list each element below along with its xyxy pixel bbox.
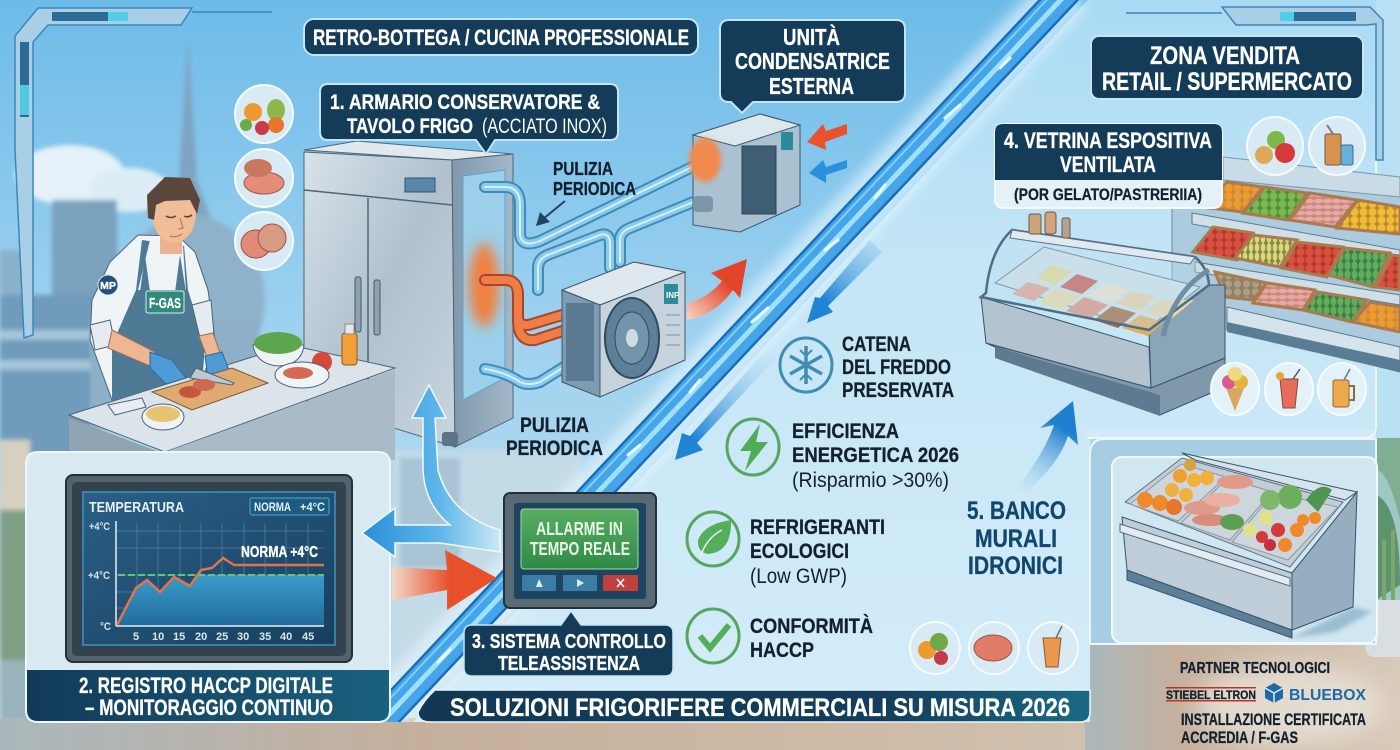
icon: fruit: [235, 85, 293, 143]
arrow: red alarm signal: [392, 550, 497, 610]
monitor: 35: [259, 631, 271, 643]
feature: energy efficiency: ENERGETICA 2026: [792, 444, 959, 467]
heading: zona vendita: [1091, 36, 1363, 99]
feature: HACCP compliance: HACCP: [750, 639, 814, 662]
monitor: +4°C: [88, 570, 110, 582]
icon: steak: [235, 212, 293, 270]
feature: ecological refrigerants: [687, 512, 885, 588]
monitor: NORMA: [254, 500, 291, 514]
label 1: armario conservatore: 1. ARMARIO CONSERVATORE &: [330, 91, 600, 114]
feature: ecological refrigerants: REFRIGERANTI: [750, 516, 885, 539]
chef apron badge: F-GAS: [149, 295, 181, 312]
chef: [90, 177, 231, 401]
heading: zona vendita: ZONA VENDITA: [1150, 42, 1300, 70]
icons: bottom food circles: [910, 622, 1078, 674]
feature: HACCP compliance: CONFORMITÀ: [750, 615, 873, 638]
icon: meat: [969, 622, 1019, 674]
feature: ecological refrigerants: ECOLOGICI: [750, 540, 849, 563]
monitor: 15: [173, 631, 185, 643]
crates row 3: [1215, 272, 1400, 332]
label 1: armario conservatore: [320, 84, 618, 154]
arrow: cold chain down 1: [807, 240, 882, 323]
label 4: vetrina espositiva: 4. VETRINA ESPOSITIVA: [1004, 128, 1212, 153]
label: pulizia periodica upper: PULIZIA: [553, 159, 613, 179]
monitor: 40: [280, 631, 292, 643]
icon: snowflake: [780, 338, 832, 392]
partners and certification: [1166, 660, 1366, 747]
label 5: banco murali: 5. BANCO: [967, 497, 1066, 525]
icon: drinks: [1309, 117, 1365, 175]
monitor: 5: [133, 631, 139, 643]
icon: check mark: [687, 609, 739, 663]
device: remote control alarm: [504, 493, 656, 608]
counter: [69, 345, 395, 460]
icon: beer mug: [1318, 363, 1366, 415]
label: unita condensatrice: CONDENSATRICE: [735, 48, 890, 74]
arrow: three-way control flow: [362, 385, 500, 557]
device: remote control alarm: ALLARME IN: [536, 519, 623, 539]
plant: [1340, 438, 1400, 657]
arrow: cold chain down 2: [675, 350, 776, 460]
logo: Bluebox: [1265, 683, 1366, 704]
frame: top right corner: [1126, 7, 1383, 160]
monitor: 45: [302, 631, 314, 643]
label: unita condensatrice: ESTERNA: [769, 73, 854, 99]
icon: juice cocktail: [1265, 363, 1313, 415]
monitor: 20: [195, 631, 207, 643]
fridge: steel cabinet: [304, 141, 513, 447]
icon: apples: [1247, 117, 1303, 175]
monitor: 10: [152, 631, 164, 643]
label 3: control system: 3. SISTEMA CONTROLLO: [472, 631, 666, 653]
label: pulizia periodica lower: [506, 414, 603, 460]
panel: HACCP digital register: 2. REGISTRO HACCP DIGITALE: [79, 673, 333, 698]
logo: Bluebox: BLUEBOX: [1289, 687, 1366, 704]
icon: fruit: [910, 622, 960, 674]
monitor: +4°C: [300, 500, 325, 514]
icons: food circles left: [235, 85, 293, 270]
label 5: banco murali: MURALI: [975, 525, 1057, 553]
crates row 1: [1202, 182, 1400, 234]
feature: cold chain: CATENA: [842, 333, 911, 356]
icon: lightning bolt: [727, 419, 779, 475]
panel: HACCP digital register: – MONITORAGGIO CONTINUO: [85, 695, 333, 720]
partners and certification: PARTNER TECNOLOGICI: [1180, 660, 1330, 677]
fruit and vegetables: [1137, 459, 1332, 552]
heading: retro-bottega: RETRO-BOTTEGA / CUCINA PROFESSIONALE: [313, 25, 689, 50]
condensing unit: external: [689, 114, 800, 232]
diagonal divider band: [368, 0, 1070, 722]
icon: drink: [1028, 622, 1078, 674]
label: unita condensatrice: UNITÀ: [783, 23, 840, 50]
arrow: hot air out: [687, 259, 747, 320]
label 4: vetrina espositiva: (POR GELATO/PASTRERIIA): [1014, 185, 1202, 204]
counter body: [1120, 453, 1357, 638]
monitor: 30: [237, 631, 249, 643]
label 4: vetrina espositiva: VENTILATA: [1060, 152, 1156, 177]
pipes: refrigerant lines: [485, 162, 708, 384]
frame: top left corner: [15, 8, 272, 338]
label 5: banco murali: [967, 497, 1066, 580]
monitor: TEMPERATURA: [89, 499, 184, 516]
icon: meat cut: [235, 149, 293, 207]
feature: cold chain: [780, 333, 954, 402]
panel: retail zone background: [413, 0, 1400, 722]
label 1: armario conservatore: (ACCIATO INOX): [482, 115, 607, 138]
feature: energy efficiency: EFFICIENZA: [792, 420, 899, 443]
panel: HACCP digital register: [26, 452, 390, 722]
monitor: 25: [216, 631, 228, 643]
condensing unit: main: [562, 262, 685, 397]
icons: retail lower circles: [1211, 363, 1366, 415]
monitor: +4°C: [89, 521, 110, 533]
panel: multideck counter: [1090, 439, 1377, 644]
feature: ecological refrigerants: (Low GWP): [750, 565, 847, 588]
monitor: NORMA +4°C: [241, 544, 318, 561]
label 3: control system: TELEASSISTENZA: [498, 653, 640, 675]
label: pulizia periodica lower: PERIODICA: [506, 437, 603, 460]
label: pulizia periodica upper: [536, 159, 636, 226]
feature: cold chain: PRESERVATA: [842, 379, 954, 402]
floor: [0, 640, 1400, 750]
device: remote control alarm: TEMPO REALE: [530, 539, 630, 559]
food on counter: [108, 324, 357, 430]
feature: cold chain: DEL FREDDO: [842, 356, 951, 379]
label: unita condensatrice: [720, 20, 905, 113]
label 4: vetrina espositiva: [995, 124, 1222, 208]
condensing unit: main: INP: [666, 291, 680, 300]
feature: energy efficiency: [727, 419, 959, 492]
chef: MP: [100, 281, 116, 292]
icons: retail top circles: [1247, 117, 1365, 175]
logo: Stiebel Eltron: STIEBEL ELTRON: [1166, 690, 1256, 702]
icon: leaf: [687, 512, 739, 566]
label 1: armario conservatore: TAVOLO FRIGO: [347, 115, 473, 138]
vetrina: display case: [981, 212, 1225, 416]
label 3: control system: [464, 611, 673, 676]
heading: retro-bottega: [304, 19, 698, 55]
label: pulizia periodica upper: PERIODICA: [553, 179, 636, 199]
feature: HACCP compliance: [687, 609, 873, 663]
crates row 2: [1193, 227, 1400, 290]
label: pulizia periodica lower: PULIZIA: [520, 414, 589, 437]
partners and certification: ACCREDIA / F-GAS: [1181, 728, 1298, 747]
feature: energy efficiency: (Risparmio >30%): [792, 469, 949, 492]
retail shelves: [1172, 157, 1400, 372]
label 5: banco murali: IDRONICI: [968, 552, 1063, 580]
monitor: °C: [100, 621, 111, 633]
icon: ice cream: [1211, 363, 1259, 415]
arrows: air flow at external unit: [807, 124, 847, 183]
arrow: up to vetrina: [1016, 401, 1078, 494]
title banner: SOLUZIONI FRIGORIFERE COMMERCIALI SU MISURA 2026: [450, 694, 1070, 722]
monitor: [66, 475, 352, 662]
